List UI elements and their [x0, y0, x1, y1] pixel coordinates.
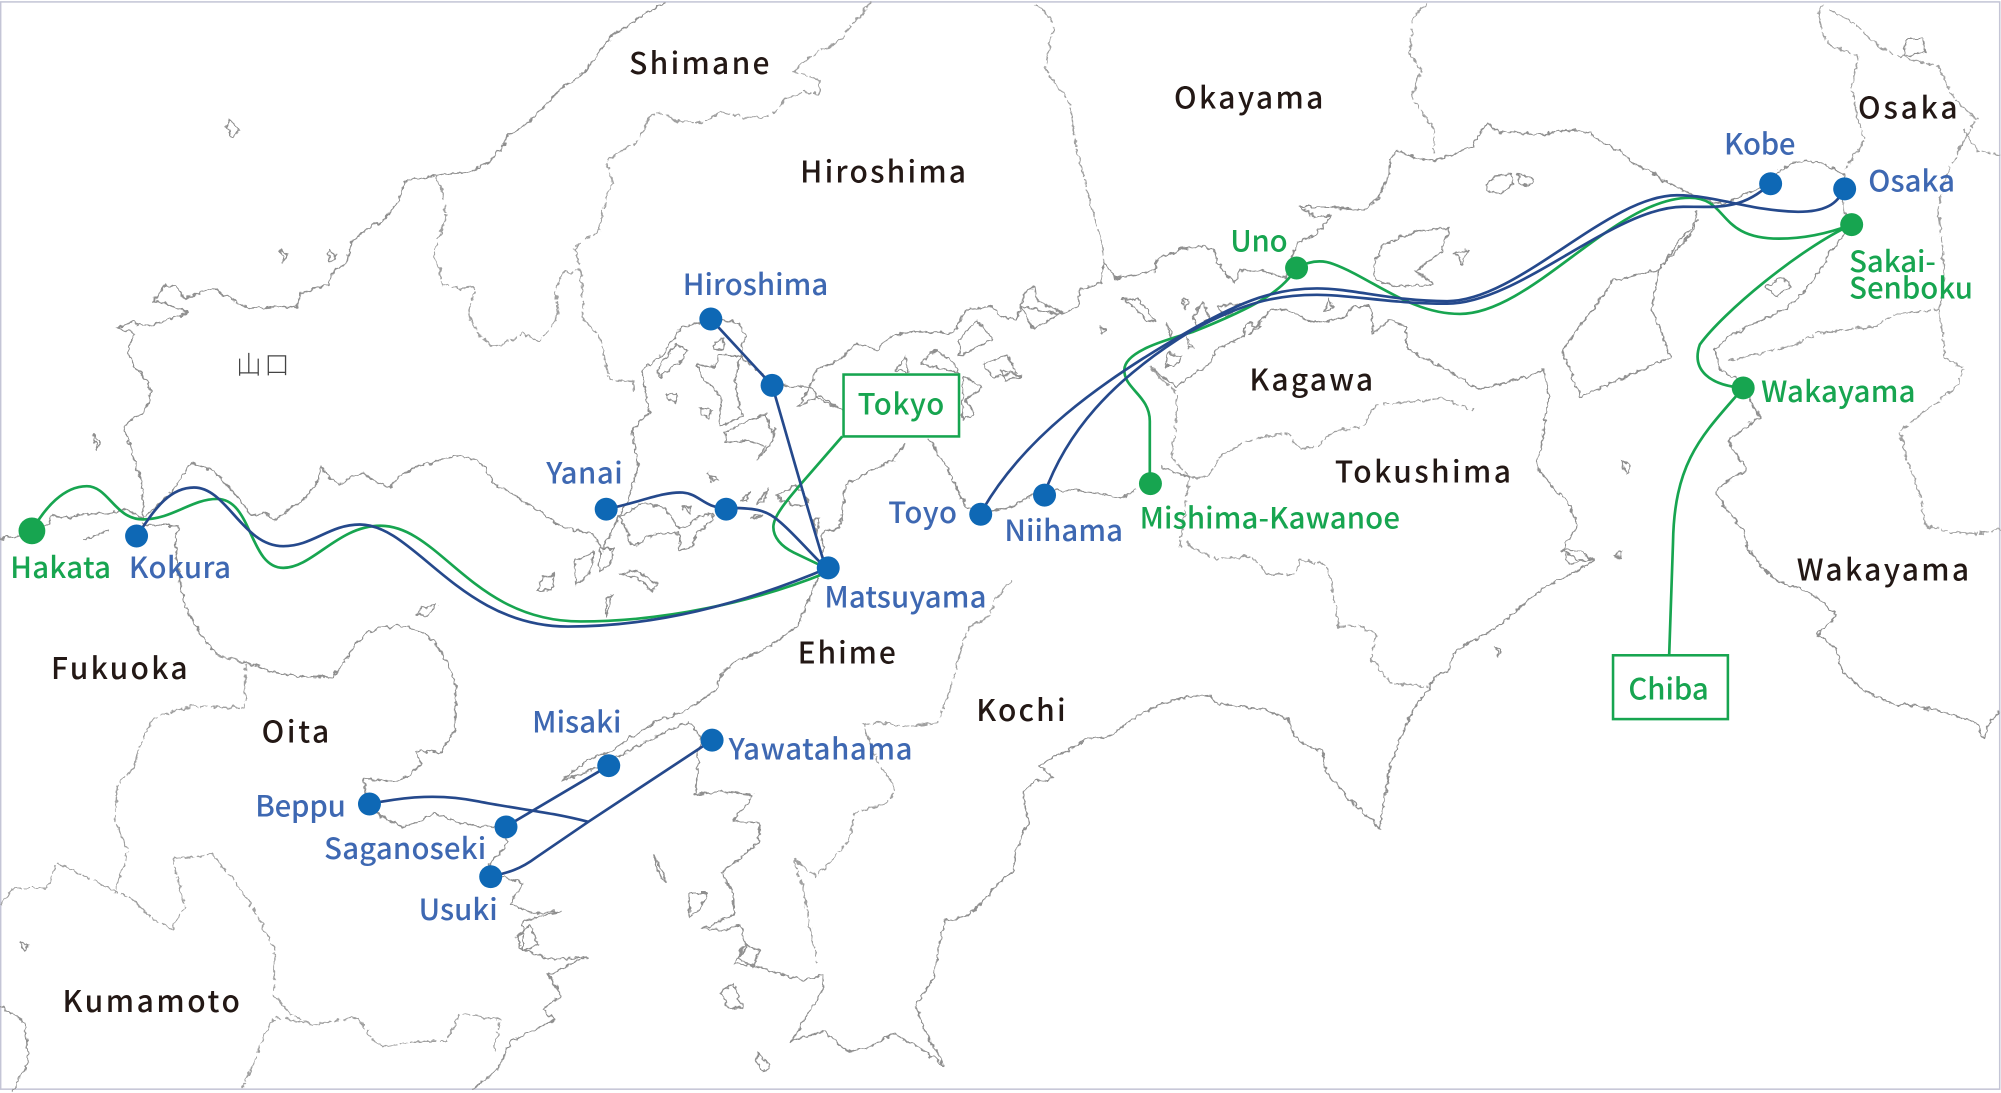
route: Hiroshima to Matsuyama	[711, 319, 826, 568]
prefecture label: Kumamoto: Kumamoto	[63, 977, 240, 1021]
port: Yawatahama: Yawatahama	[728, 726, 912, 768]
port: Matsuyama	[817, 556, 986, 616]
port: Hiroshima	[683, 262, 828, 331]
route: Sakai-Senboku to Wakayama	[1698, 225, 1852, 388]
route: Saganoseki to Misaki	[505, 766, 609, 827]
port: Toyo	[888, 490, 992, 532]
prefecture label: Tokushima: Tokushima	[1335, 447, 1511, 491]
route: Uno to Mishima-Kawanoe	[1124, 268, 1297, 484]
route callout box: Chiba: Chiba	[1628, 666, 1709, 708]
prefecture label: Shimane: Shimane	[629, 39, 770, 83]
prefecture label: Hiroshima: Hiroshima	[800, 147, 966, 191]
prefecture label: Kochi: Kochi	[976, 686, 1066, 730]
port: Hiroshima: Hiroshima	[683, 262, 828, 304]
port: Mishima-Kawanoe: Mishima-Kawanoe	[1140, 495, 1400, 537]
prefecture label: Oita: Oita	[262, 708, 329, 752]
prefecture label: Okayama: Okayama	[1174, 73, 1323, 117]
port: Misaki	[532, 699, 621, 777]
port: Kure	[761, 374, 784, 397]
prefecture label: Kagawa: Kagawa	[1249, 355, 1373, 399]
port: Uno: Uno	[1230, 218, 1288, 260]
route: Uno to Sakai-Senboku	[1297, 198, 1852, 314]
port: Usuki	[419, 865, 502, 929]
port: Sakai-Senboku: Senboku	[1849, 266, 1973, 308]
port: Sakai-Senboku	[1840, 213, 1973, 308]
route callout box: Tokyo	[844, 375, 959, 436]
port: Saganoseki	[324, 815, 517, 868]
port: Saganoseki: Saganoseki	[324, 826, 486, 868]
prefecture label: Wakayama: Wakayama	[1797, 546, 1969, 590]
port: Kobe: Kobe	[1724, 121, 1796, 163]
route: Hakata to Matsuyama	[32, 486, 826, 621]
prefecture label: Fukuoka: Fukuoka	[51, 644, 188, 688]
route: Toyo to Osaka	[980, 189, 1844, 514]
port: Beppu: Beppu	[255, 784, 346, 826]
port: Uno	[1230, 218, 1308, 279]
route: Niihama to Kobe	[1044, 184, 1770, 495]
route: Usuki to Yawatahama	[490, 740, 712, 877]
route: Beppu to Yawatahama	[369, 797, 588, 822]
prefecture label: Osaka: Osaka	[1858, 84, 1958, 128]
port: Hakata	[10, 517, 111, 587]
port: Misaki: Misaki	[532, 699, 621, 741]
route callout box: Chiba	[1613, 655, 1728, 719]
port: Kokura	[125, 524, 231, 587]
port: Mishima-Kawanoe	[1139, 472, 1400, 537]
route: Tokyo to Matsuyama	[773, 436, 842, 567]
port: Mitsugahama	[715, 498, 738, 521]
port: Yanai	[545, 451, 623, 521]
port: Kokura: Kokura	[129, 545, 231, 587]
port: Yanai: Yanai	[545, 451, 623, 493]
port: Usuki: Usuki	[419, 887, 498, 929]
route callout box: Tokyo: Tokyo	[858, 382, 944, 424]
port: Toyo: Toyo	[888, 490, 957, 532]
port: Niihama	[1004, 484, 1123, 550]
port: Matsuyama: Matsuyama	[824, 574, 986, 616]
port: Niihama: Niihama	[1004, 508, 1123, 550]
route: Kokura to Matsuyama	[137, 487, 828, 627]
route: Yanai to Matsuyama	[606, 492, 823, 565]
prefecture label: Ehime: Ehime	[798, 629, 896, 673]
port: Hakata: Hakata	[10, 545, 111, 587]
port: Osaka: Osaka	[1868, 158, 1955, 200]
route: Wakayama to Chiba	[1669, 388, 1743, 655]
prefecture label: Yamaguchi: 山口	[236, 345, 290, 382]
port: Kobe	[1724, 121, 1796, 195]
port: Sakai-Senboku: Sakai-	[1849, 239, 1936, 281]
port: Wakayama: Wakayama	[1761, 369, 1915, 411]
